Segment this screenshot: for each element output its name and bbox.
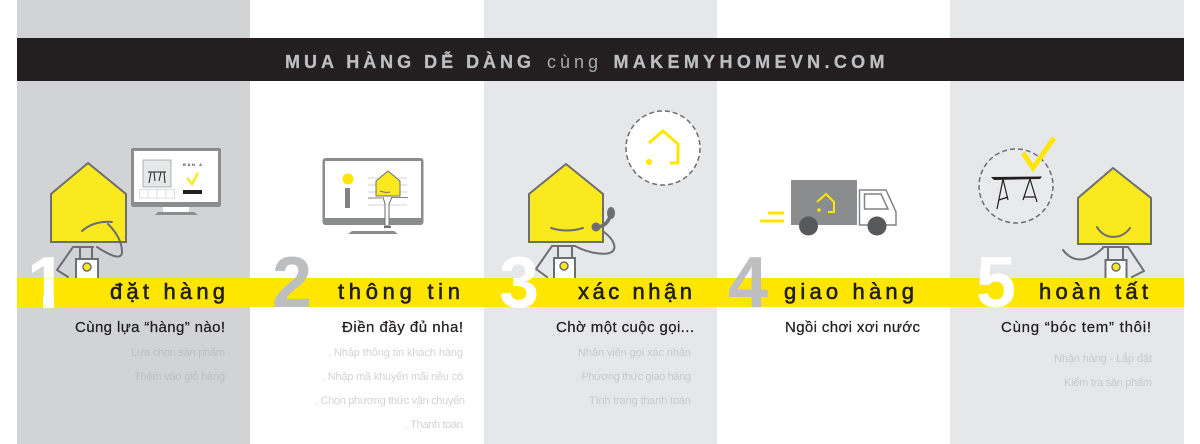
icon: happy house character [1063, 168, 1151, 282]
panel: step 3 confirmation [484, 0, 717, 444]
icon: computer monitor with product [131, 148, 221, 215]
number 5: 5 [976, 243, 1016, 323]
heading: Cùng lựa “hàng” nào! [75, 319, 225, 336]
step label: hoàn tất [1039, 279, 1148, 304]
icon: computer monitor with product: BÀN A [183, 162, 202, 167]
list item: . Nhập thông tin khách hàng [328, 347, 463, 359]
title bar: MAKEMYHOMEVN.COM [614, 52, 884, 72]
panel: step 1 order [17, 0, 250, 444]
number 4: 4 [728, 243, 768, 323]
list item: Kiểm tra sản phẩm [1064, 377, 1152, 389]
icon: table in dashed circle with check [979, 138, 1054, 223]
heading: Chờ một cuộc gọi... [556, 319, 694, 336]
title bar: cùng [547, 52, 598, 72]
step label: đặt hàng [110, 279, 225, 304]
icon: monitor with house figure [322, 158, 424, 234]
number 1: 1 [27, 243, 67, 323]
list item: Thêm vào giỏ hàng [134, 371, 225, 383]
icon: house character on phone [529, 164, 615, 280]
icon: delivery truck [760, 180, 896, 236]
title bar [17, 38, 1184, 81]
panel: step 5 complete [950, 0, 1184, 444]
number 1 [32, 257, 54, 308]
step label: thông tin [338, 279, 460, 304]
number 3: 3 [499, 243, 539, 323]
list item: . Chọn phương thức vận chuyển [315, 395, 465, 407]
list item: . Nhập mã khuyến mãi nếu có [322, 371, 463, 383]
list item: . Thanh toán [405, 419, 463, 431]
number 2: 2 [272, 243, 312, 323]
icon: dashed logo circle [626, 111, 700, 185]
list item: Tình trạng thanh toán [589, 395, 691, 407]
icon: house character with cord [51, 163, 126, 281]
title bar: MUA HÀNG DỄ DÀNG [285, 51, 531, 72]
panel: step 4 delivery [717, 0, 950, 444]
list item: Lựa chọn sản phẩm [131, 347, 225, 359]
list item: Nhận hàng - Lắp đặt [1054, 352, 1152, 365]
step label: xác nhận [578, 279, 692, 304]
heading: Cùng “bóc tem” thôi! [1001, 319, 1151, 336]
list item: . Phương thức giao hàng [576, 371, 691, 383]
step label: giao hàng [784, 279, 914, 304]
heading: Ngồi chơi xơi nước [785, 319, 920, 336]
heading: Điền đầy đủ nha! [342, 319, 463, 336]
list item: Nhân viên gọi xác nhận [578, 347, 691, 359]
panel: step 2 information [250, 0, 484, 444]
